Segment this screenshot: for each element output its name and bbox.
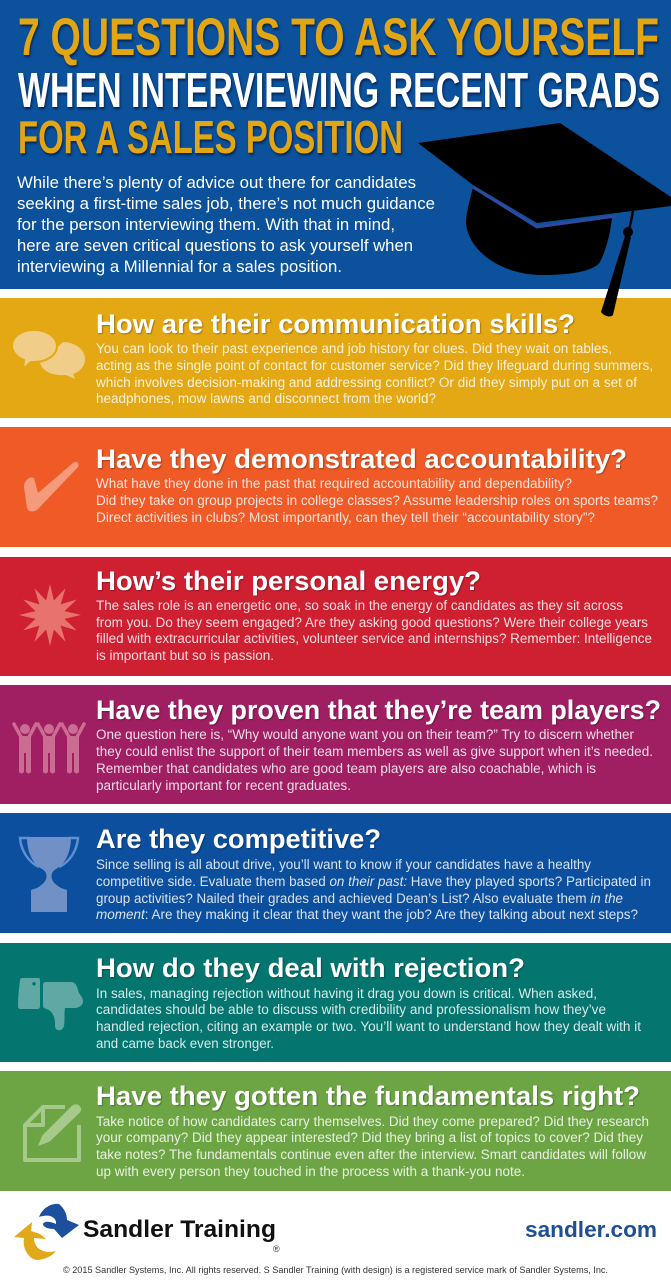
intro paragraph: interviewing a Millennial for a sales position. <box>17 257 342 276</box>
body text: they could enlist the support of their team members as well as give support when it’s needed. <box>96 744 653 759</box>
body text: up with every person they touched in the process with a thank-you note. <box>96 1164 525 1179</box>
heading: How’s their personal energy? <box>96 566 481 596</box>
registered mark: ® <box>273 1244 280 1254</box>
body text: from you. Do they seem engaged? Are they asking good questions? Were their college years <box>96 615 648 630</box>
body text: Direct activities in clubs? Most importantly, can they tell their “accountability story”? <box>96 510 595 525</box>
wordmark: Sandler Training <box>83 1216 276 1243</box>
body text: competitive side. Evaluate them based on their past: Have they played sports? Participated in <box>96 874 651 889</box>
panel: competitive <box>0 813 671 933</box>
intro paragraph: While there’s plenty of advice out there for candidates <box>17 173 416 192</box>
body text: You can look to their past experience and job history for clues. Did they wait on tables, <box>96 341 612 356</box>
body text: and came back even stronger. <box>96 1036 274 1051</box>
body text: filled with extracurricular activities, volunteer service and internships? Remember: Intelligence <box>96 631 652 646</box>
body text <box>95 341 653 406</box>
body text <box>96 857 651 922</box>
body text: moment: Are they making it clear that they want the job? Are they talking about next steps? <box>96 907 638 922</box>
body text: One question here is, “Why would anyone want you on their team?” Try to discern whether <box>96 727 635 742</box>
heading: Have they proven that they’re team players? <box>96 695 661 725</box>
body text <box>96 727 653 793</box>
icon: energy burst <box>19 584 81 646</box>
body text: is important but so is passion. <box>96 648 274 663</box>
icon: check mark <box>24 462 79 512</box>
heading: Have they gotten the fundamentals right? <box>96 1081 640 1111</box>
icon: speech bubbles <box>12 330 85 379</box>
body text: Since selling is all about drive, you’ll want to know if your candidates have a healthy <box>96 857 591 872</box>
body text <box>96 986 641 1051</box>
icon: trophy <box>20 837 78 912</box>
body text: particularly important for recent graduates. <box>96 778 351 793</box>
heading: How do they deal with rejection? <box>96 953 525 983</box>
panel: communication skills <box>0 298 671 418</box>
panel: header <box>0 0 671 289</box>
panel: rejection <box>0 943 671 1062</box>
logo: Sandler Training <box>14 1204 280 1260</box>
icon: note and pencil <box>25 1104 82 1160</box>
title line 3: FOR A SALES POSITION <box>18 111 403 163</box>
icon: S arrows mark <box>14 1204 79 1260</box>
body text: headphones, mow lawns and disconnect from the world? <box>96 391 436 406</box>
body text: What have they done in the past that required accountability and dependability? <box>96 476 572 491</box>
heading: How are their communication skills? <box>96 309 575 339</box>
body text <box>96 476 658 525</box>
icon: three people <box>14 724 84 771</box>
body text: handled rejection, citing an example or two. You’ll want to understand how they dealt with it <box>96 1019 641 1034</box>
panel: fundamentals <box>0 1071 671 1191</box>
body text <box>96 1114 649 1179</box>
panel: personal energy <box>0 557 671 676</box>
intro paragraph <box>17 173 435 276</box>
body text: group activities? Nailed their grades and achieved Dean’s List? Also evaluate them in the <box>96 891 623 906</box>
intro paragraph: seeking a first-time sales job, there’s not much guidance <box>17 194 435 213</box>
body text: acting as the single point of contact for customer service? Did they lifeguard during summers, <box>96 358 653 373</box>
copyright: © 2015 Sandler Systems, Inc. All rights reserved. S Sandler Training (with design) is a registered service mark of Sandler Systems, Inc. <box>63 1265 608 1275</box>
body text: your company? Did they appear interested? Did they bring a list of topics to cover? Did they <box>96 1130 643 1145</box>
body text: Remember that candidates who are good team players are also coachable, which is <box>96 761 596 776</box>
panel: team players <box>0 685 671 804</box>
panel: accountability <box>0 427 671 547</box>
body text: candidates should be able to discuss with credibility and professionalism how they’ve <box>96 1002 606 1017</box>
body text: Take notice of how candidates carry themselves. Did they come prepared? Did they research <box>96 1114 649 1129</box>
body text: which involves decision-making and addressing conflict? Or did they simply put on a set of <box>95 375 637 390</box>
intro paragraph: for the person interviewing them. With that in mind, <box>17 215 395 234</box>
intro paragraph: here are seven critical questions to ask yourself when <box>17 236 413 255</box>
icon: graduation cap <box>418 123 671 316</box>
body text: The sales role is an energetic one, so soak in the energy of candidates as they sit across <box>96 598 623 613</box>
body text: take notes? The fundamentals continue even after the interview. Smart candidates will follow <box>96 1147 646 1162</box>
body text: Did they take on group projects in college classes? Assume leadership roles on sports teams? <box>96 493 658 508</box>
body text <box>96 598 652 663</box>
body text: In sales, managing rejection without having it drag you down is critical. When asked, <box>96 986 597 1001</box>
heading: Have they demonstrated accountability? <box>96 444 627 474</box>
website: sandler.com <box>525 1217 657 1242</box>
heading: Are they competitive? <box>96 824 381 854</box>
icon: thumbs down <box>18 978 83 1030</box>
